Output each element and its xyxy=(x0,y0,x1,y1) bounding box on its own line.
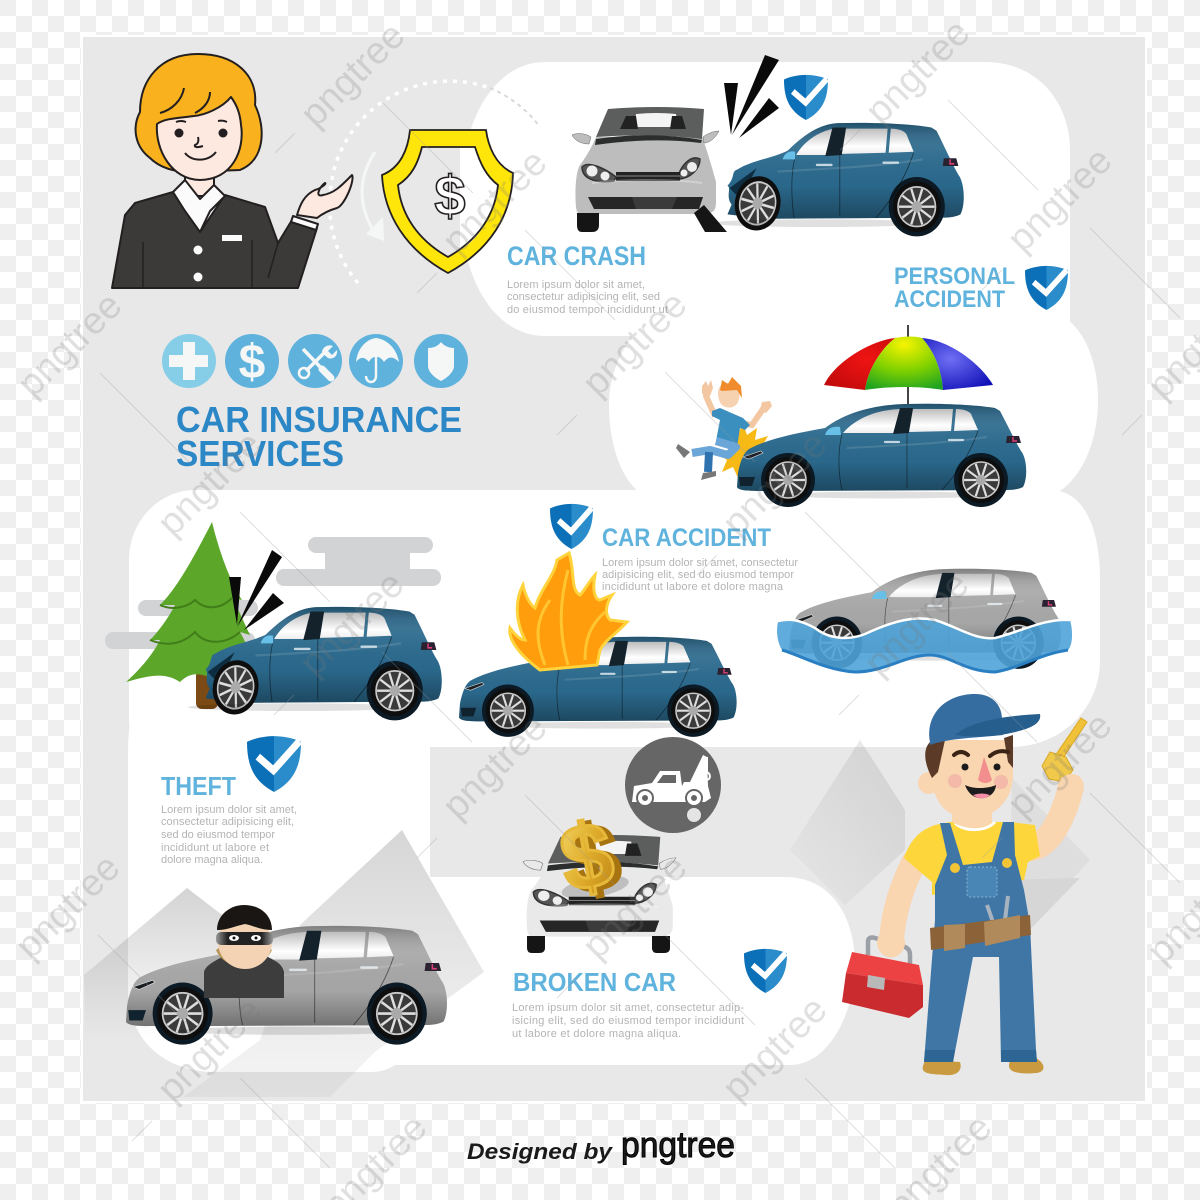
heading: theft: THEFT xyxy=(161,771,236,801)
mechanic hand on handle xyxy=(877,929,905,957)
title xyxy=(176,399,462,474)
agent face xyxy=(157,97,242,180)
body text: Lorem ipsum dolor sit amet, consectetur adip- xyxy=(512,1002,744,1014)
agent neck xyxy=(185,170,214,196)
illustration: mechanic xyxy=(842,694,1087,1075)
grey backing panel xyxy=(82,36,1146,1102)
mechanic neck xyxy=(952,810,992,828)
mechanic shoes xyxy=(923,1058,1044,1075)
impact spikes xyxy=(724,55,779,138)
white car front view xyxy=(523,835,676,953)
footer credit xyxy=(467,1124,735,1165)
body text: sed do eiusmod tempor xyxy=(161,829,275,841)
body text xyxy=(602,557,798,593)
shield check xyxy=(784,75,828,120)
watermark overlay: pngtree xyxy=(150,424,270,544)
white ribbon path xyxy=(128,62,1100,1072)
icon: dollar: $ xyxy=(239,336,266,389)
watermark overlay: pngtree xyxy=(435,142,555,262)
icon: dollar xyxy=(225,334,279,389)
watermark overlay: pngtree xyxy=(575,284,695,404)
blue car on fire xyxy=(459,637,737,737)
illustration: insurance agent woman xyxy=(112,54,353,288)
flame xyxy=(510,553,627,670)
shield check xyxy=(744,949,787,993)
title: CAR INSURANCE xyxy=(176,399,462,440)
body text: Lorem ipsum dolor sit amet, xyxy=(507,279,645,291)
agent hand xyxy=(297,175,353,218)
watermark overlay: pngtree xyxy=(1000,705,1120,825)
watermark overlay: pngtree xyxy=(857,564,977,684)
red toolbox xyxy=(842,938,923,1018)
body text xyxy=(512,1002,744,1040)
panel: car crash xyxy=(507,55,964,316)
watermark overlay: pngtree xyxy=(858,12,978,132)
falling man xyxy=(676,377,772,480)
panel: personal accident xyxy=(676,263,1068,507)
impact spikes xyxy=(229,550,284,630)
body text: adipisicing elit, sed do eiusmod tempor xyxy=(602,569,794,581)
panel: broken car xyxy=(512,737,787,1040)
body text: incididunt ut labore et xyxy=(161,842,269,854)
mechanic shirt xyxy=(904,822,1040,895)
blue car under umbrella xyxy=(737,404,1026,507)
body text xyxy=(161,804,297,866)
watermark overlay: pngtree xyxy=(292,564,412,684)
grey car in flood xyxy=(789,569,1061,669)
crashed blue car xyxy=(710,123,964,236)
grey getaway car xyxy=(126,926,447,1045)
footer credit: Designed by xyxy=(467,1139,614,1164)
icon: wrench and screwdriver xyxy=(288,334,342,388)
heading: broken car: BROKEN CAR xyxy=(513,967,676,997)
service icons row xyxy=(162,334,468,389)
watermark overlay: pngtree xyxy=(8,847,128,967)
body text: do eiusmod tempor incididunt ut xyxy=(507,304,668,316)
mechanic raised arm xyxy=(1028,787,1071,848)
watermark overlay: pngtree xyxy=(575,847,695,967)
agent collar xyxy=(173,180,225,232)
mechanic belt xyxy=(930,915,1031,951)
icon: yellow shield with dollar xyxy=(382,130,513,273)
mechanic overalls xyxy=(924,822,1037,1062)
explosion burst xyxy=(718,423,770,478)
heading: car accident: CAR ACCIDENT xyxy=(602,524,771,552)
agent jacket xyxy=(112,192,317,288)
tree xyxy=(126,522,260,709)
agent hair xyxy=(136,54,262,172)
title: SERVICES xyxy=(176,433,344,474)
watermark overlay: pngtree xyxy=(1000,140,1120,260)
heading: personal accident xyxy=(894,263,1015,313)
watermark overlay: pngtree xyxy=(293,15,413,135)
watermark overlay: pngtree xyxy=(150,990,270,1110)
agent name badge and buttons xyxy=(143,235,278,288)
watermark overlay: pngtree xyxy=(715,989,835,1109)
gold dollar sign: $ xyxy=(553,803,621,912)
watermark overlay: pngtree xyxy=(715,424,835,544)
background mountains behind mechanic xyxy=(790,740,1090,950)
icon: yellow shield with dollar: $ xyxy=(434,164,466,227)
body text: incididunt ut labore et dolore magna xyxy=(602,581,784,593)
panel: theft xyxy=(126,736,447,1045)
body text: Lorem ipsum dolor sit amet, consectetur xyxy=(602,557,798,569)
curved arrow xyxy=(362,152,384,241)
flood water xyxy=(777,619,1072,672)
body text: ut labore et dolore magna aliqua. xyxy=(512,1028,681,1040)
watermark overlay: pngtree xyxy=(10,285,130,405)
heading: personal accident: ACCIDENT xyxy=(894,286,1005,313)
mechanic raised hand xyxy=(1057,774,1082,797)
rainbow umbrella xyxy=(824,325,993,404)
gold key xyxy=(1042,718,1087,782)
masked thief xyxy=(204,905,284,998)
clouds xyxy=(105,537,441,649)
blue car crashed into tree xyxy=(188,607,442,720)
shield check xyxy=(550,504,593,549)
body text: isicing elit, sed do eiusmod tempor incididunt xyxy=(512,1015,744,1027)
icon: medical plus xyxy=(162,334,216,388)
dotted orbit arc xyxy=(330,81,540,283)
icon: tow truck badge xyxy=(625,737,721,833)
background mountains behind thief xyxy=(84,830,484,1097)
mechanic cap xyxy=(929,694,1040,745)
shield check xyxy=(247,736,301,792)
agent cuff xyxy=(291,216,318,230)
body text: consectetur adipisicing elit, sed xyxy=(507,291,660,303)
body text: dolore magna aliqua. xyxy=(161,854,263,866)
icon: umbrella xyxy=(349,334,403,388)
panel: car accident xyxy=(105,504,1072,737)
heading: personal accident: PERSONAL xyxy=(894,263,1015,290)
icon: badge shield xyxy=(414,334,468,388)
body text: Lorem ipsum dolor sit amet, xyxy=(161,804,297,816)
mechanic head xyxy=(918,735,1013,818)
heading: car crash: CAR CRASH xyxy=(507,241,646,271)
grey car front view xyxy=(572,107,727,232)
mechanic tools in pocket xyxy=(987,896,1008,925)
footer credit: pngtree xyxy=(621,1124,735,1165)
gold dollar sign: $ xyxy=(559,804,627,914)
body text xyxy=(507,279,668,316)
shield check xyxy=(1025,266,1068,310)
body text: consectetur adipisicing elit, xyxy=(161,816,294,828)
agent facial features xyxy=(160,88,228,160)
watermark overlay: pngtree xyxy=(435,707,555,827)
mechanic left arm xyxy=(891,862,914,945)
